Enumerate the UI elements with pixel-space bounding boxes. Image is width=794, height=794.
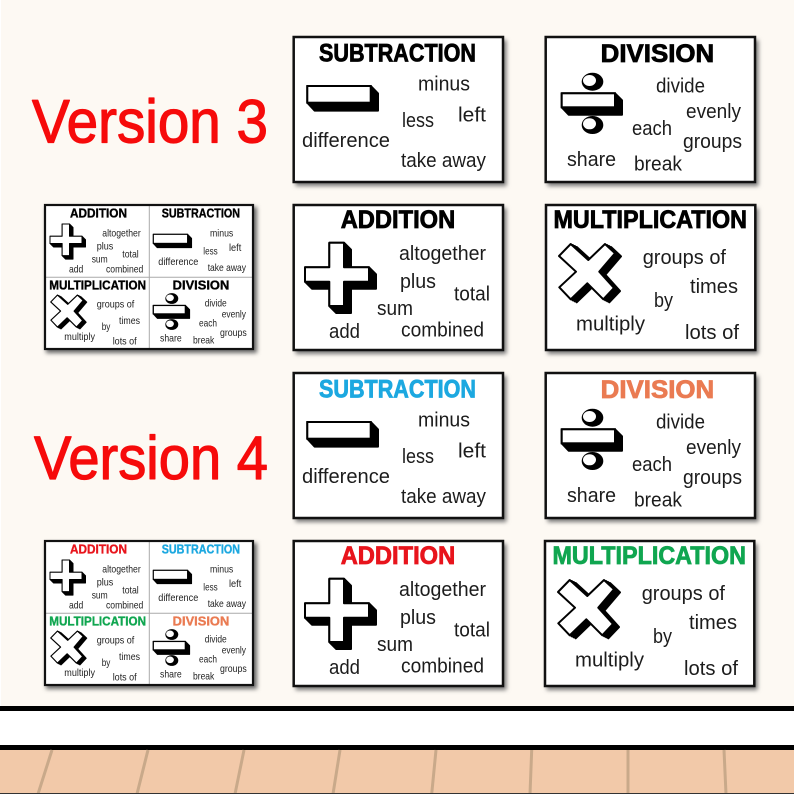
summary chart: coloured titles: take away <box>208 599 247 610</box>
summary chart: black titles: share <box>160 334 182 345</box>
poster: subtraction <box>294 37 506 186</box>
poster: subtraction (blue): left <box>458 441 486 463</box>
summary chart: coloured titles: minus <box>210 565 233 576</box>
icon: minus <box>307 422 378 447</box>
poster: multiplication (green): MULTIPLICATION <box>552 542 746 570</box>
poster: subtraction (blue) <box>294 373 506 522</box>
summary chart: black titles: DIVISION <box>173 278 229 292</box>
summary chart: black titles: divide <box>205 299 227 310</box>
poster: division (orange): evenly <box>686 437 741 459</box>
icon: times <box>558 580 620 638</box>
summary chart: coloured titles: groups of <box>97 635 134 646</box>
icon: small divide <box>153 293 190 330</box>
summary chart: coloured titles: break <box>193 671 215 682</box>
poster: division: each <box>632 118 672 140</box>
poster: multiplication: by <box>654 290 673 312</box>
poster: multiplication: lots of <box>685 322 739 344</box>
poster: multiplication: MULTIPLICATION <box>554 206 747 234</box>
summary chart: black titles: add <box>69 265 84 276</box>
poster: addition <box>294 205 506 354</box>
poster: multiplication: times <box>690 276 738 298</box>
poster: subtraction (blue): SUBTRACTION <box>319 376 476 404</box>
summary chart: coloured titles: evenly <box>222 645 247 656</box>
summary chart: black titles: combined <box>106 264 144 275</box>
icon: minus <box>307 86 378 111</box>
icon: times <box>559 244 621 302</box>
poster: addition (red): sum <box>377 634 413 656</box>
summary chart: black titles: lots of <box>113 336 137 347</box>
poster: addition: total <box>454 284 490 306</box>
icon: small divide <box>153 629 190 666</box>
summary chart: black titles <box>45 205 257 353</box>
summary chart: black titles: times <box>119 316 140 327</box>
summary chart: black titles: MULTIPLICATION <box>49 278 146 292</box>
Version 3 group of cards <box>45 37 758 354</box>
heading: Version 4: Version 4 <box>34 424 268 492</box>
poster: addition (red): plus <box>400 607 436 629</box>
poster: subtraction: SUBTRACTION <box>319 40 476 68</box>
summary chart: coloured titles: add <box>69 601 84 612</box>
poster: division: groups <box>683 131 742 153</box>
poster: multiplication (green): groups of <box>642 583 725 605</box>
poster: division (orange): groups <box>683 467 742 489</box>
icon: divide <box>562 73 622 134</box>
summary chart: black titles: groups <box>220 328 247 339</box>
poster: division (orange): DIVISION <box>601 376 714 404</box>
poster: subtraction: take away <box>401 150 486 172</box>
poster: multiplication <box>546 205 758 354</box>
summary chart: coloured titles: divide <box>205 635 227 646</box>
poster: subtraction (blue): minus <box>418 410 470 432</box>
poster: multiplication: groups of <box>643 247 726 269</box>
poster: multiplication (green): times <box>689 612 737 634</box>
summary chart: coloured titles: SUBTRACTION <box>162 542 240 556</box>
wooden floor <box>0 750 794 794</box>
poster: addition: ADDITION <box>341 206 455 234</box>
summary chart: coloured titles: left <box>229 579 241 590</box>
summary chart: coloured titles: groups <box>220 664 247 675</box>
poster: division (orange) <box>546 373 758 522</box>
summary chart: black titles: take away <box>208 263 247 274</box>
poster: addition: altogether <box>399 243 486 265</box>
summary chart: coloured titles: multiply <box>64 668 96 679</box>
summary chart: coloured titles: sum <box>92 590 108 601</box>
summary chart: coloured titles: times <box>119 652 140 663</box>
summary chart: coloured titles: plus <box>97 577 113 588</box>
summary chart: coloured titles: each <box>199 655 217 666</box>
summary chart: coloured titles: MULTIPLICATION <box>49 614 146 628</box>
poster: subtraction (blue): difference <box>302 466 390 488</box>
summary chart: black titles: altogether <box>102 229 141 240</box>
poster: addition (red) <box>294 541 506 690</box>
icon: small minus <box>153 570 192 584</box>
summary chart: coloured titles <box>45 541 257 689</box>
icon: small plus <box>50 560 86 595</box>
icon: divide <box>562 409 622 470</box>
poster: division: share <box>567 149 616 171</box>
poster: division (orange): share <box>567 485 616 507</box>
poster: division (orange): each <box>632 454 672 476</box>
poster: addition: combined <box>401 320 484 342</box>
poster: subtraction: left <box>458 105 486 127</box>
summary chart: coloured titles: by <box>102 658 111 669</box>
summary chart: coloured titles: combined <box>106 600 144 611</box>
icon: small times <box>51 295 87 329</box>
summary chart: coloured titles: ADDITION <box>70 542 127 556</box>
summary chart: black titles: ADDITION <box>70 206 127 220</box>
poster: subtraction (blue): take away <box>401 486 486 508</box>
poster: division <box>546 37 758 186</box>
poster: addition: add <box>329 321 360 343</box>
summary chart: black titles: sum <box>92 254 108 265</box>
poster: subtraction: minus <box>418 74 470 96</box>
poster: division (orange): break <box>634 490 683 512</box>
heading: Version 3: Version 3 <box>32 88 268 156</box>
poster: addition: sum <box>377 298 413 320</box>
summary chart: black titles: each <box>199 319 217 330</box>
summary chart: black titles: total <box>122 249 139 260</box>
poster: division (orange): divide <box>656 412 705 434</box>
summary chart: coloured titles: lots of <box>113 672 137 683</box>
poster: multiplication (green): multiply <box>575 650 644 672</box>
poster: addition (red): add <box>329 657 360 679</box>
summary chart: coloured titles: difference <box>158 593 199 604</box>
poster: addition (red): altogether <box>399 579 486 601</box>
poster: multiplication: multiply <box>576 314 645 336</box>
summary chart: black titles: SUBTRACTION <box>162 206 240 220</box>
summary chart: black titles: multiply <box>64 332 96 343</box>
summary chart: coloured titles: less <box>203 582 218 593</box>
summary chart: coloured titles: share <box>160 670 182 681</box>
summary chart: black titles: groups of <box>97 299 134 310</box>
summary chart: coloured titles: altogether <box>102 565 141 576</box>
Version 4 group of cards <box>45 373 758 690</box>
summary chart: black titles: by <box>102 322 111 333</box>
summary chart: coloured titles: DIVISION <box>173 614 229 628</box>
poster: multiplication (green) <box>545 541 758 690</box>
poster: division: evenly <box>686 101 741 123</box>
summary chart: black titles: plus <box>97 241 113 252</box>
icon: small times <box>51 631 87 665</box>
poster: subtraction: less <box>402 110 434 132</box>
poster: subtraction (blue): less <box>402 446 434 468</box>
poster: division: DIVISION <box>601 40 714 68</box>
poster: addition (red): combined <box>401 656 484 678</box>
poster: multiplication (green): lots of <box>684 658 738 680</box>
summary chart: coloured titles: total <box>122 585 139 596</box>
summary chart: black titles: break <box>193 335 215 346</box>
icon: plus <box>305 579 376 649</box>
poster: subtraction: difference <box>302 130 390 152</box>
summary chart: black titles: minus <box>210 229 233 240</box>
summary chart: black titles: evenly <box>222 309 247 320</box>
icon: plus <box>305 243 376 313</box>
poster: multiplication (green): by <box>653 626 672 648</box>
poster: division: divide <box>656 76 705 98</box>
summary chart: black titles: left <box>229 243 241 254</box>
icon: small plus <box>50 224 86 259</box>
summary chart: black titles: difference <box>158 257 199 268</box>
poster: division: break <box>634 154 683 176</box>
summary chart: black titles: less <box>203 246 218 257</box>
poster: addition: plus <box>400 271 436 293</box>
poster: addition (red): ADDITION <box>341 542 455 570</box>
poster: addition (red): total <box>454 620 490 642</box>
icon: small minus <box>153 234 192 248</box>
